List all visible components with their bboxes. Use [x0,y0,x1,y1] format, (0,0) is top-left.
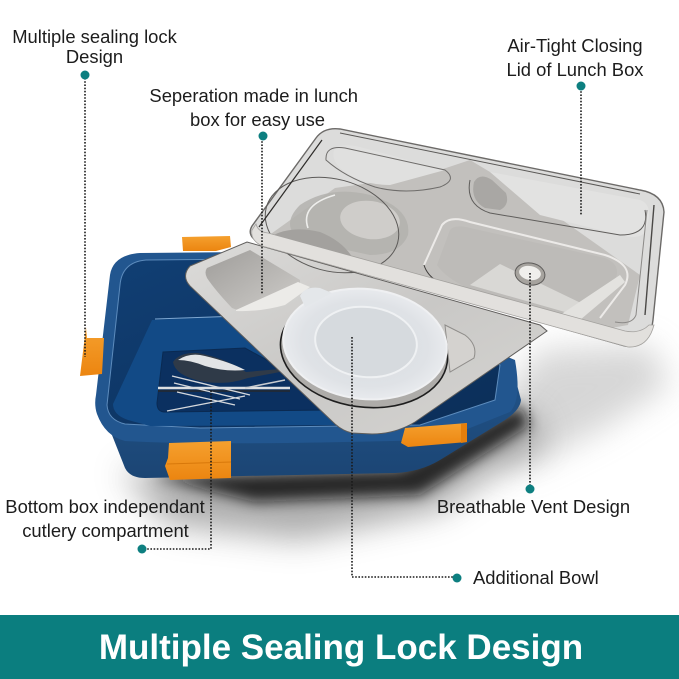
transparent lid [250,129,664,347]
callout: air-tight closing lid: Lid of Lunch Box [506,59,644,80]
box front wall [110,340,521,478]
bowl rim dark [273,284,455,418]
steel divided tray [186,242,547,434]
banner: Multiple Sealing Lock Design [99,628,583,667]
callout: cutlery compartment [5,390,211,554]
bowl side compartment [445,325,475,372]
box interior [107,259,500,428]
orange latch: left [80,327,104,376]
callout: multiple sealing lock design: Design [66,46,123,67]
lid interior showing tray [250,129,664,346]
box rim [95,252,518,443]
callout: air-tight closing lid: Air-Tight Closing [507,35,643,56]
lid frosted corners [333,145,445,185]
orange latch: front left [165,441,231,480]
callout: separation in lunch box [149,85,358,294]
breathable vent [513,261,547,287]
orange latch: back [182,236,231,251]
callout: separation in lunch box: Seperation made in lunch [149,85,358,106]
bowl lid [278,281,452,407]
callout: breathable vent design [437,273,630,517]
callout: additional bowl [352,337,599,588]
fork and knife [158,387,290,389]
ground shadow [120,345,670,540]
callout: cutlery compartment: Bottom box independant [5,496,205,517]
callout: air-tight closing lid [506,35,644,215]
callout: additional bowl: Additional Bowl [473,567,599,588]
callout: multiple sealing lock design [12,26,178,357]
steel seen through lid [268,160,640,330]
banner [0,615,679,679]
cutlery compartment [157,348,330,412]
spoon [173,353,280,383]
tray well left [206,250,300,311]
orange latch: front right [401,423,467,447]
callout: separation in lunch box: box for easy use [190,109,325,130]
lunch box base: blue [80,236,521,480]
callout: breathable vent design: Breathable Vent Design [437,496,630,517]
lid front lip [252,224,654,347]
callout: cutlery compartment: cutlery compartment [22,520,189,541]
lid contour lines [254,133,654,323]
callout: multiple sealing lock design: Multiple sealing lock [12,26,178,47]
